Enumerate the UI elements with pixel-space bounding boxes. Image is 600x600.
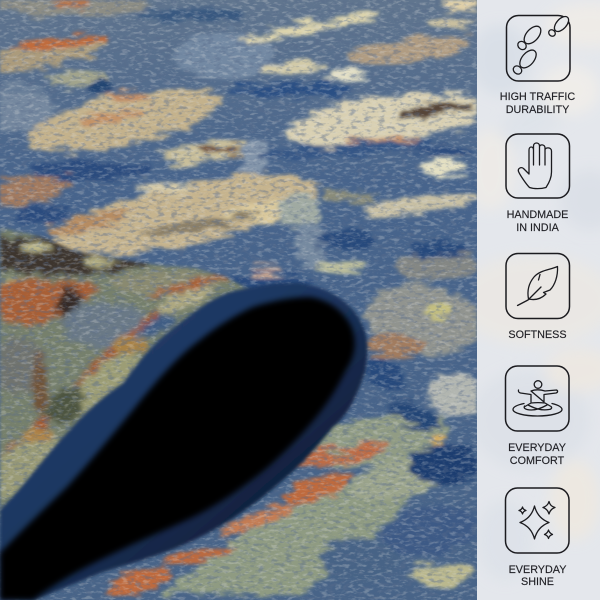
label: everyday shine xyxy=(509,564,566,588)
label: high traffic durability: HIGH TRAFFIC xyxy=(500,91,575,103)
feature: high traffic durability xyxy=(500,14,575,116)
label: everyday comfort: COMFORT xyxy=(510,455,565,467)
label: high traffic durability: DURABILITY xyxy=(506,104,569,116)
side panel: frosted feature column xyxy=(477,0,600,600)
label: high traffic durability xyxy=(500,91,575,116)
rolled corner: reverse side of rug xyxy=(0,227,248,518)
rolled corner: navy border and black underside xyxy=(0,283,367,600)
icon: hand xyxy=(506,134,570,198)
label: softness: SOFTNESS xyxy=(508,329,567,341)
feature: softness xyxy=(506,254,570,341)
icon: footprints xyxy=(506,14,571,81)
icon: sparkles xyxy=(506,488,569,553)
lower green field xyxy=(160,485,410,595)
label: everyday shine: EVERYDAY xyxy=(509,564,566,576)
label: handmade in India xyxy=(507,209,568,234)
feature: everyday comfort xyxy=(506,366,569,467)
dark blue mottling xyxy=(409,445,481,485)
feature: everyday shine xyxy=(506,488,569,588)
label: everyday comfort xyxy=(508,442,566,467)
icon: feather xyxy=(506,254,570,318)
label: handmade in India: HANDMADE xyxy=(507,209,568,221)
label: everyday shine: SHINE xyxy=(521,576,554,588)
rug fibre flecks xyxy=(0,0,477,600)
icon: meditating figure xyxy=(506,366,569,431)
feature: handmade in India xyxy=(506,134,570,234)
label: everyday comfort: EVERYDAY xyxy=(508,442,566,454)
label: handmade in India: IN INDIA xyxy=(516,222,560,234)
